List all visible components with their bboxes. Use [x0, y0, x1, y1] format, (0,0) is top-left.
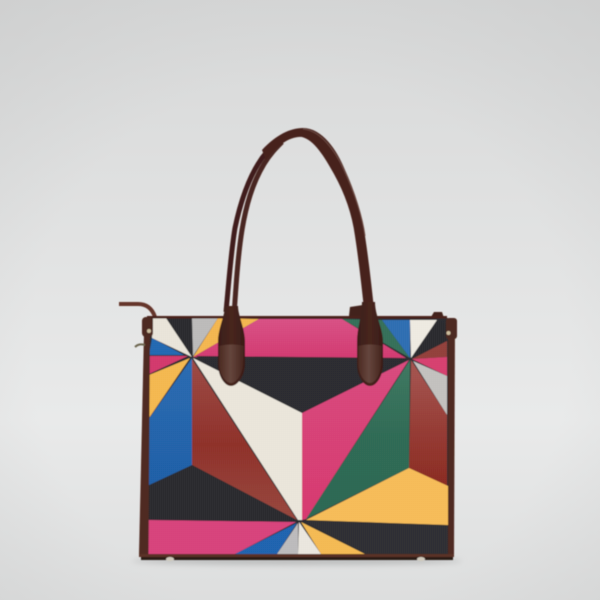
back handle — [226, 132, 302, 312]
floor shadow — [132, 557, 462, 565]
top right black wedge — [412, 320, 447, 358]
green large wedge — [306, 360, 410, 519]
left pink wedge — [149, 356, 188, 374]
small left blue wedge — [149, 338, 184, 355]
right brown block — [409, 360, 447, 486]
right corner tab — [446, 318, 457, 339]
dark red wedge — [192, 359, 297, 520]
lower right black band — [303, 521, 448, 554]
top right white wedge — [410, 320, 437, 358]
right brown wedge — [412, 341, 447, 359]
right handle tab — [357, 302, 383, 386]
centre white wedge — [193, 358, 302, 520]
rivet right — [446, 331, 450, 335]
right gray wedge — [413, 361, 447, 415]
top left white wedge — [152, 318, 192, 357]
right edge — [448, 320, 455, 555]
top green wedge — [342, 319, 410, 358]
left corner tab — [142, 317, 153, 337]
bag — [119, 128, 457, 561]
lower right yellow block — [306, 468, 448, 525]
left yellow wedge — [149, 358, 190, 418]
woven panel — [146, 318, 448, 554]
left edge — [139, 332, 150, 555]
top left black wedge — [166, 318, 192, 357]
leather frame — [135, 316, 457, 560]
rear top edge tabs — [349, 305, 444, 318]
lower left black block — [147, 465, 296, 520]
right pink wedge — [412, 357, 447, 376]
left blue block — [147, 358, 192, 486]
top yellow wedge — [193, 318, 259, 357]
top left gray wedge — [192, 318, 218, 356]
bag feet — [166, 557, 425, 561]
front handle — [234, 128, 375, 318]
side clasp — [135, 344, 145, 347]
zip pull at top left — [119, 304, 155, 317]
bottom pink band — [146, 520, 296, 554]
bottom gray wedge — [277, 523, 298, 554]
bottom white wedge — [298, 522, 321, 554]
top pink band — [193, 319, 406, 358]
bottom yellow wedge — [301, 522, 365, 554]
bottom edge — [139, 554, 454, 557]
rivet left — [147, 329, 151, 333]
panel base — [147, 318, 448, 554]
left handle tab — [218, 306, 245, 386]
top blue wedge — [382, 320, 410, 358]
top edge — [147, 316, 447, 318]
weave texture — [147, 318, 448, 554]
centre black block — [196, 356, 406, 413]
pink large wedge — [302, 360, 409, 520]
bottom blue wedge — [235, 523, 297, 554]
